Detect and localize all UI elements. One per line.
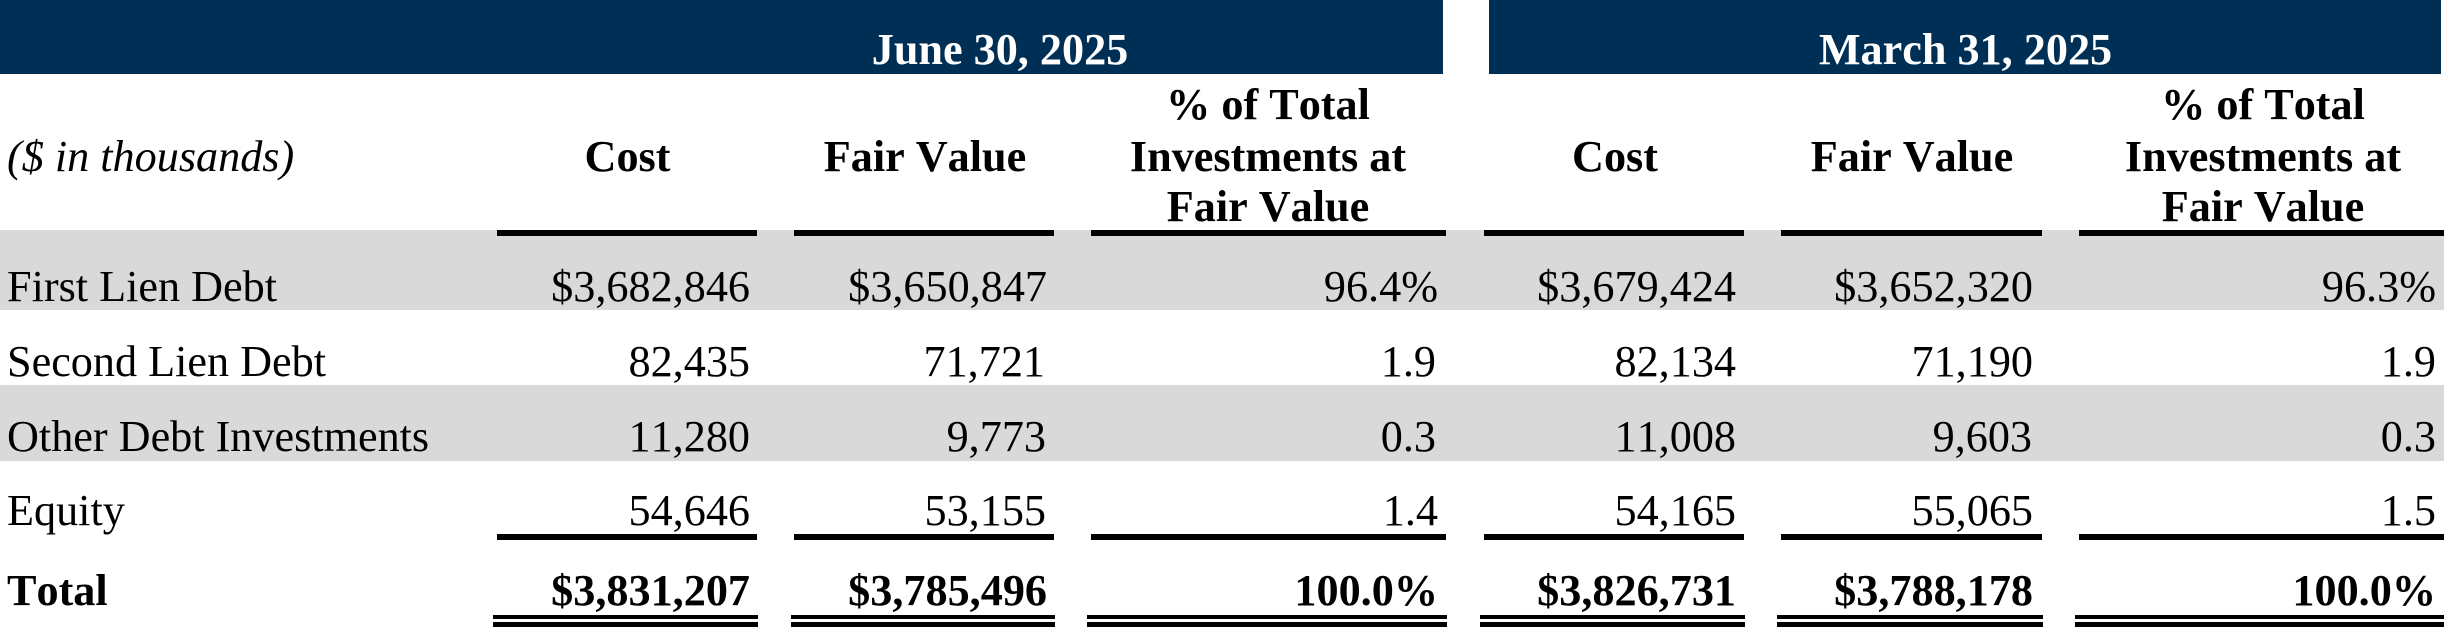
row: First Lien Debt: $3,650,847 <box>848 262 1047 311</box>
row: First Lien Debt: 96.4% <box>1324 262 1438 311</box>
row: Equity: 53,155 <box>924 486 1046 535</box>
column headers <box>7 80 2401 231</box>
column header: percent of total, June <box>1130 80 1406 231</box>
column header: percent of total, June: Fair Value <box>1167 182 1369 231</box>
row: Second Lien Debt: 71,190 <box>1911 337 2033 386</box>
row: Equity: 54,165 <box>1614 486 1736 535</box>
row: Total: $3,826,731 <box>1537 566 1736 615</box>
row: Second Lien Debt: 71,721 <box>923 337 1045 386</box>
row: First Lien Debt <box>7 262 2436 311</box>
column header: percent of total, June: Investments at <box>1130 132 1406 181</box>
row: Other Debt Investments: Other Debt Investments <box>7 412 429 461</box>
row: Equity: 55,065 <box>1911 486 2033 535</box>
heading: March 31, 2025: March 31, 2025 <box>1819 25 2112 74</box>
row: Total: $3,831,207 <box>551 566 750 615</box>
row: Total: 100.0% <box>1294 566 1438 615</box>
row: Total: $3,785,496 <box>848 566 1047 615</box>
column header: percent of total, March <box>2125 80 2401 231</box>
column header: percent of total, March: % of Total <box>2161 80 2365 129</box>
heading: June 30, 2025 <box>0 0 1443 74</box>
heading: June 30, 2025: June 30, 2025 <box>872 25 1128 74</box>
row: Total: 100.0% <box>2292 566 2436 615</box>
row: First Lien Debt: $3,652,320 <box>1834 262 2033 311</box>
row: Other Debt Investments: 9,773 <box>947 412 1046 461</box>
row: First Lien Debt: $3,682,846 <box>551 262 750 311</box>
row: First Lien Debt: 96.3% <box>2322 262 2436 311</box>
subtotal rules <box>497 534 2444 540</box>
row: Equity: 1.4 <box>1383 486 1438 535</box>
heading: March 31, 2025 <box>1489 0 2441 74</box>
row: Second Lien Debt <box>7 337 2436 386</box>
row: Other Debt Investments: 11,008 <box>1614 412 1736 461</box>
panel: shaded row background other debt investments <box>0 385 2444 461</box>
row: Second Lien Debt: 82,435 <box>628 337 750 386</box>
row: Other Debt Investments: 0.3 <box>1381 412 1436 461</box>
total double rules <box>493 615 2444 627</box>
row: Total: Total <box>7 566 108 615</box>
column header: percent of total, March: Investments at <box>2125 132 2401 181</box>
units note: ($ in thousands) <box>7 132 294 181</box>
column header: percent of total, March: Fair Value <box>2162 182 2364 231</box>
row: Other Debt Investments: 9,603 <box>1933 412 2032 461</box>
row: Equity: 54,646 <box>628 486 750 535</box>
row: Total: $3,788,178 <box>1834 566 2033 615</box>
row: Total <box>7 566 2436 615</box>
row: Equity: 1.5 <box>2381 486 2436 535</box>
column header: cost, March: Cost <box>1572 132 1658 181</box>
row: Other Debt Investments: 0.3 <box>2381 412 2436 461</box>
column header: percent of total, June: % of Total <box>1166 80 1370 129</box>
column header: fair value, March: Fair Value <box>1811 132 2013 181</box>
row: Equity <box>7 486 2436 535</box>
row: First Lien Debt: $3,679,424 <box>1537 262 1736 311</box>
column header: cost, June: Cost <box>585 132 671 181</box>
row: Second Lien Debt: 1.9 <box>2381 337 2436 386</box>
row: First Lien Debt: First Lien Debt <box>7 262 278 311</box>
panel: shaded row background first lien debt <box>0 230 2444 310</box>
row: Equity: Equity <box>7 486 125 535</box>
row: Second Lien Debt: Second Lien Debt <box>7 337 327 386</box>
column header: fair value, June: Fair Value <box>824 132 1026 181</box>
row: Other Debt Investments: 11,280 <box>628 412 750 461</box>
row: Second Lien Debt: 1.9 <box>1381 337 1436 386</box>
header rules <box>497 230 2444 236</box>
row: Other Debt Investments <box>7 412 2436 461</box>
row: Second Lien Debt: 82,134 <box>1614 337 1736 386</box>
